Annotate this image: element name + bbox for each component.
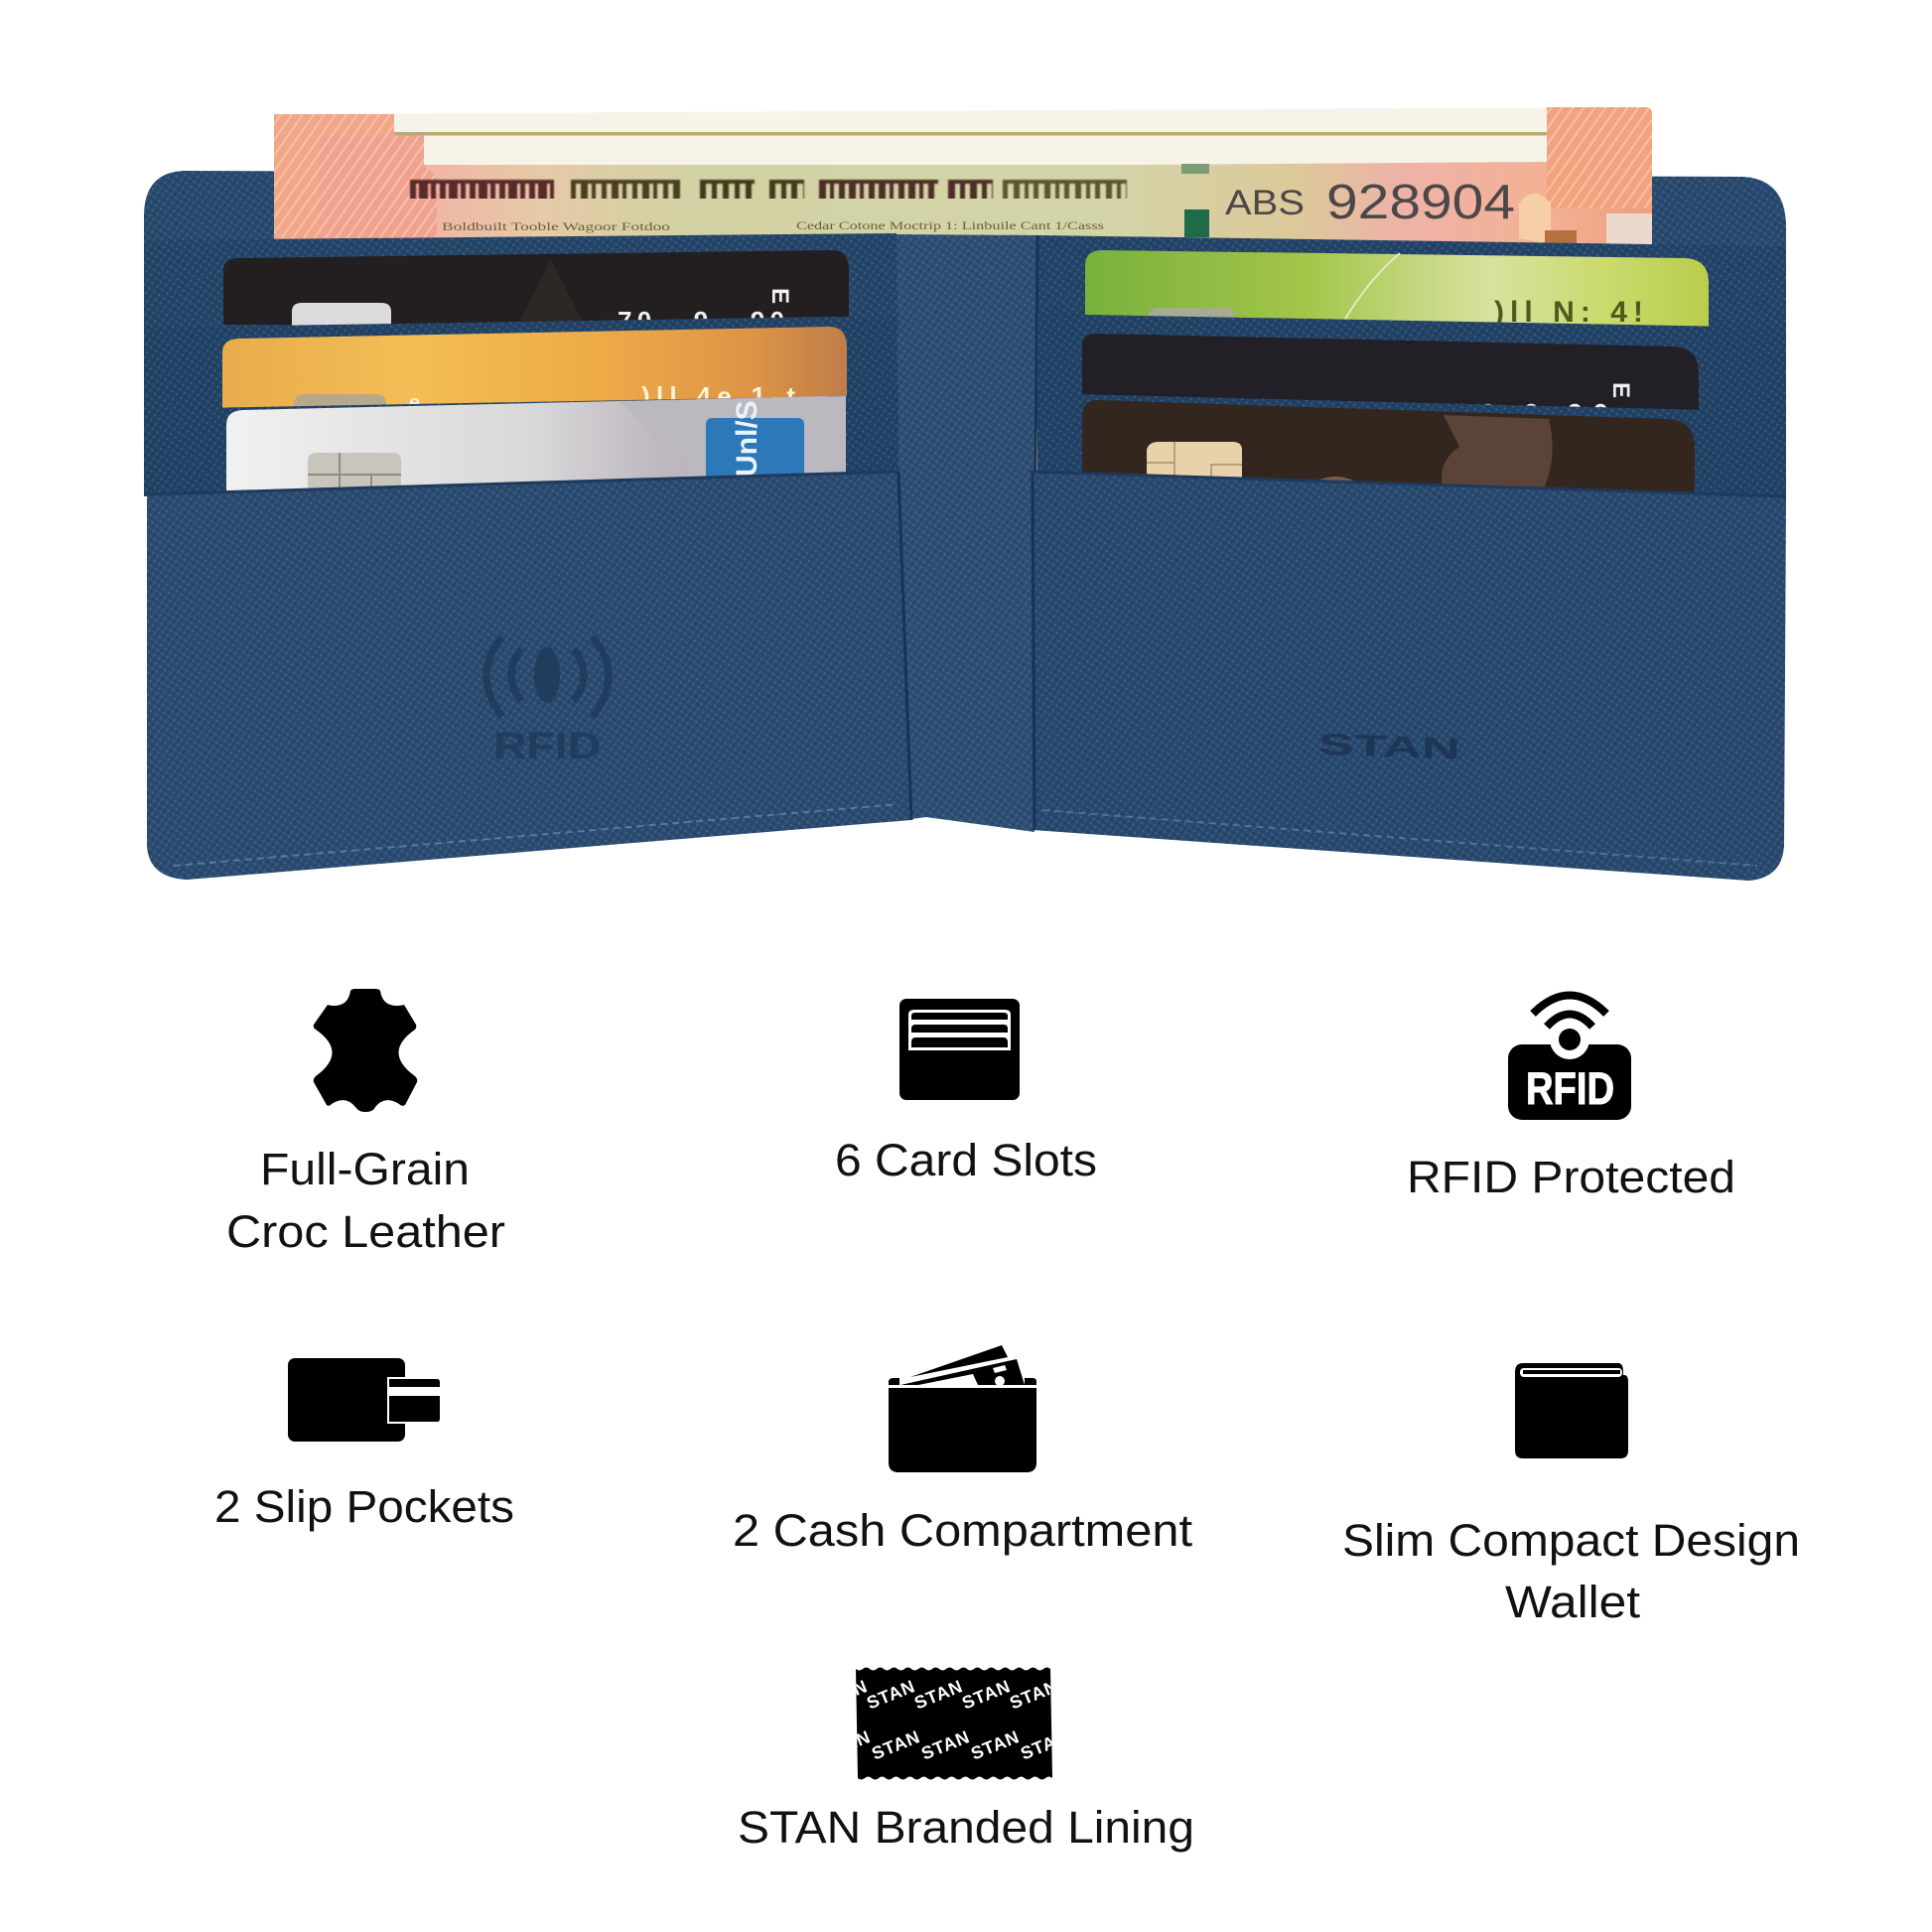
label: RFID Protected: RFID Protected [1407, 1152, 1735, 1202]
icon: lining swatch: STAN [968, 1726, 1022, 1764]
icon: lining swatch: STAN [918, 1726, 972, 1764]
embossed STAN logo: STAN [1317, 728, 1460, 765]
feature: 2 Cash Compartment [733, 1345, 1193, 1556]
banknote fine print [442, 218, 1104, 233]
icon: cash wallet [889, 1345, 1036, 1472]
banknote fine print: Boldbuilt Tooble Wagoor Fotdoo [442, 219, 670, 233]
card: orange [222, 327, 847, 414]
right front pocket [1031, 472, 1786, 881]
card: dark: 20 9 90 [1454, 398, 1608, 429]
feature: Slim Compact Design Wallet [1342, 1363, 1800, 1627]
right slot 3 [1037, 393, 1786, 506]
card: black top left [223, 250, 849, 336]
feature: 2 Slip Pockets [214, 1358, 514, 1532]
feature: RFID Protected [1407, 995, 1735, 1202]
label: 2 Cash Compartment: 2 Cash Compartment [733, 1505, 1193, 1556]
center spine [889, 234, 1037, 832]
banknote [274, 107, 1652, 246]
embossed RFID logo [486, 637, 609, 767]
back panel of wallet [144, 171, 1786, 343]
icon: lining swatch [856, 1668, 1052, 1779]
feature: 6 Card Slots [835, 999, 1097, 1185]
wallet photo [144, 107, 1786, 881]
banknote fine print: Cedar Cotone Moctrip 1: Linbuile Cant 1/Casss [796, 218, 1104, 232]
card: dark [1082, 334, 1699, 429]
label: Croc Leather: Croc Leather [226, 1206, 505, 1257]
card: orange: e [409, 392, 420, 414]
icon: RFID tag: RFID [1526, 1063, 1614, 1114]
icon: lining swatch: STAN [816, 1676, 870, 1714]
icon: card holder [899, 999, 1020, 1100]
banknote hindi text [410, 182, 1127, 196]
icon: lining swatch: STAN [1018, 1726, 1071, 1764]
feature: STAN Branded Lining [738, 1666, 1194, 1853]
left front pocket [147, 472, 911, 880]
label: 2 Slip Pockets: 2 Slip Pockets [214, 1481, 514, 1532]
icon: lining swatch: STAN [869, 1726, 922, 1764]
label: STAN Branded Lining: STAN Branded Lining [738, 1802, 1194, 1853]
card: black top left: 70 9 90 [618, 306, 784, 336]
embossed RFID logo: RFID [493, 726, 601, 767]
card: green [1085, 250, 1709, 338]
banknote serial number [1225, 176, 1515, 229]
left slot 3 [144, 395, 898, 496]
icon: lining swatch: STAN [911, 1676, 965, 1714]
right slot 2 [1037, 314, 1786, 422]
icon: leather hide [314, 989, 417, 1112]
icon: lining swatch: STAN [819, 1726, 873, 1764]
card: black top left: E [766, 288, 793, 304]
card: silver [226, 396, 846, 496]
label: Wallet: Wallet [1505, 1577, 1641, 1627]
left slot 2 [144, 316, 898, 417]
icon: lining swatch: STAN [1007, 1676, 1060, 1714]
icon: lining swatch: STAN [864, 1676, 917, 1714]
icon: RFID tag [1508, 995, 1631, 1120]
right top slot [1035, 235, 1786, 477]
banknote serial number: ABS [1225, 184, 1305, 222]
card: orange: )ll 4e 1-t [641, 381, 795, 411]
icon: slip pocket wallet [288, 1358, 441, 1442]
left top slot [144, 233, 898, 338]
banknote serial number: 928904 [1326, 176, 1515, 229]
feature: Full-Grain Croc Leather [226, 989, 505, 1257]
card: brown [1082, 400, 1695, 506]
label: 6 Card Slots: 6 Card Slots [835, 1135, 1097, 1185]
icon: slim wallet [1515, 1363, 1628, 1458]
label: Slim Compact Design: Slim Compact Design [1342, 1515, 1800, 1566]
card: green: )ll N: 4! [1494, 296, 1643, 329]
icon: lining swatch: STAN [959, 1676, 1013, 1714]
card: silver: Unl/S [731, 400, 763, 477]
card: dark: E [1607, 382, 1634, 398]
label: Full-Grain: Full-Grain [260, 1144, 470, 1194]
